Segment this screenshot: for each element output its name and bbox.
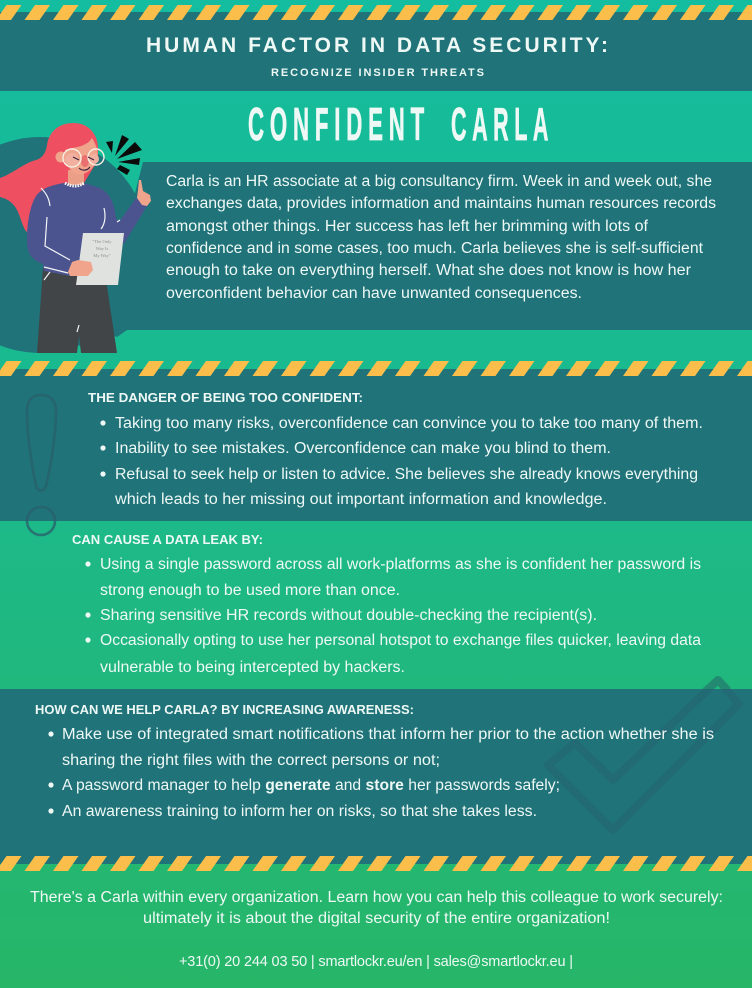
icon: black burst lines (106, 135, 142, 175)
introduction text: enough to take on everything herself. What she does not know is how her (166, 262, 691, 279)
help bullet list: Make use of integrated smart notifications that inform her prior to the action whether she is (62, 726, 714, 743)
danger heading: THE DANGER OF BEING TOO CONFIDENT: (88, 390, 363, 405)
trousers (37, 268, 117, 353)
eyes and smile (73, 157, 94, 170)
panel: can cause a data leak (72, 532, 701, 676)
cheeks and nose (65, 153, 79, 167)
introduction text (166, 173, 716, 302)
paper text (93, 239, 112, 258)
glasses (63, 149, 104, 167)
data leak heading: CAN CAUSE A DATA LEAK BY: (72, 532, 263, 547)
panel: how can we help Carla (0, 680, 752, 864)
jumper detail lines (41, 188, 120, 332)
danger bullet list (100, 415, 703, 508)
danger bullet list: which leads to her missing out important information and knowledge. (114, 491, 607, 508)
hand holding paper (68, 260, 93, 276)
introduction text: Carla is an HR associate at a big consultancy firm. Week in and week out, she (166, 173, 712, 190)
danger bullet list: Refusal to seek help or listen to advice. She believes she already knows everything (115, 466, 698, 483)
hazard stripes: top (0, 5, 752, 20)
introduction text: overconfident behavior can have unwanted consequences. (166, 285, 582, 302)
footer message (30, 889, 723, 927)
data leak bullet list: strong enough to be used more than once. (100, 582, 400, 599)
illustration: Carla (0, 123, 151, 353)
hazard stripes: bottom (0, 856, 752, 871)
data leak bullet list: vulnerable to being intercepted by hackers. (100, 659, 405, 676)
help bullet list: sharing the right files with the correct persons or not; (62, 752, 440, 769)
panel: the danger of being too confident (0, 369, 752, 521)
help bullet list: A password manager to help generate and store her passwords safely; (62, 777, 560, 794)
introduction text: exchanges data, provides information and maintains human resources records (166, 195, 716, 212)
header band (0, 12, 752, 91)
paper text: My Way" (93, 253, 111, 258)
neck and collar (68, 170, 84, 185)
persona name heading: CONFIDENT (248, 98, 430, 150)
face (65, 138, 98, 174)
footer contact details: +31(0) 20 244 03 50 | smartlockr.eu/en | sales@smartlockr.eu | (179, 954, 573, 970)
paper (76, 233, 124, 285)
backdrop circle behind character (0, 137, 148, 353)
help heading: HOW CAN WE HELP CARLA? BY INCREASING AWARENESS: (35, 702, 414, 717)
panel: introduction (100, 162, 752, 337)
icon: check mark outline (548, 680, 739, 830)
help bullet list (48, 726, 714, 820)
check mark top on green (704, 680, 728, 692)
header subtitle: RECOGNIZE INSIDER THREATS (271, 67, 484, 79)
introduction text: amongst other things. Her success has left her brimming with lots of (166, 218, 649, 235)
paper text: Way Is (96, 246, 108, 251)
footer message: ultimately it is about the digital security of the entire organization! (143, 910, 610, 927)
footer message: There's a Carla within every organization. Learn how you can help this colleague to work securely: (30, 889, 723, 906)
data leak bullet list: Occasionally opting to use her personal hotspot to exchange files quicker, leaving data (100, 632, 701, 649)
data leak bullet list: Sharing sensitive HR records without double-checking the recipient(s). (100, 607, 597, 624)
hair (0, 123, 98, 232)
help bullet list: An awareness training to inform her on risks, so that she takes less. (62, 803, 537, 820)
raised hand (137, 180, 151, 206)
introduction text: confidence and in some cases, too much. Carla believes she is self-sufficient (166, 240, 704, 257)
danger bullet list: Inability to see mistakes. Overconfidence can make you blind to them. (115, 440, 611, 457)
header title: HUMAN FACTOR IN DATA SECURITY: (146, 34, 608, 57)
data leak bullet list: Using a single password across all work-platforms as she is confident her password is (100, 556, 701, 573)
data leak bullet list (85, 556, 701, 676)
danger bullet list: Taking too many risks, overconfidence can convince you to take too many of them. (115, 415, 703, 432)
text: CARLA (451, 98, 554, 150)
hazard stripes: middle (0, 361, 752, 376)
jumper (27, 183, 147, 276)
icon: exclamation mark outline (27, 395, 56, 535)
paper text: "The Only (93, 239, 112, 244)
